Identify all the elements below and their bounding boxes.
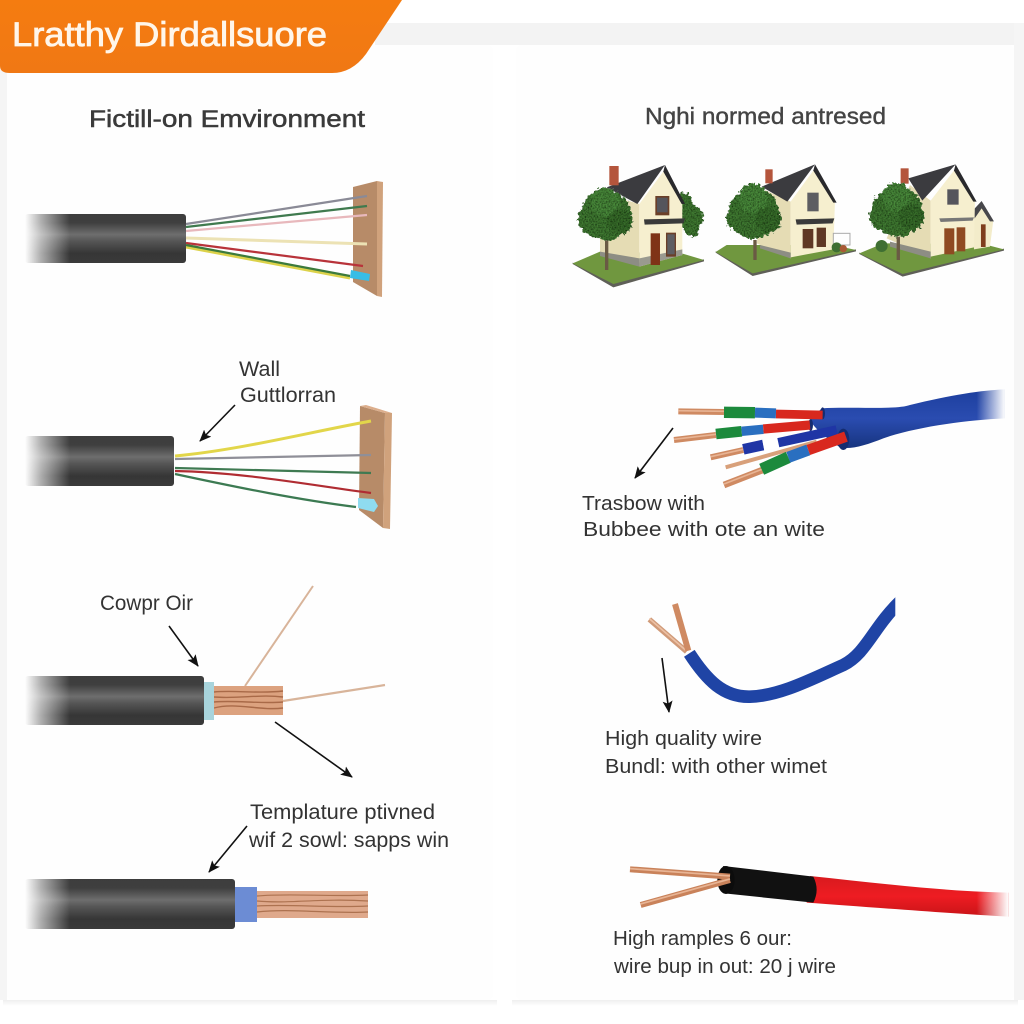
diagram: cable to wall with six wires (25, 181, 383, 297)
label: high quality wire: High quality wire (605, 728, 762, 750)
label: high ramples (613, 928, 836, 978)
house one (573, 165, 704, 287)
title banner (0, 0, 402, 73)
label: high ramples: High ramples 6 our: (613, 928, 792, 950)
label: high quality wire: Bundl: with other wimet (605, 756, 827, 778)
panel: right column (516, 45, 1014, 1000)
title banner: Lratthy Dirdallsuore (12, 16, 327, 54)
house two (716, 164, 856, 276)
arrow: wall label to wire (200, 405, 235, 441)
diagram: stripped cable with blue insulation (25, 878, 368, 930)
arrow: blue cable to label (635, 428, 673, 478)
diagram: red and black wire (630, 866, 1008, 918)
label: trasbow: Bubbee with ote an wite (583, 519, 825, 541)
house three (859, 164, 1004, 277)
diagram: curved blue wire (649, 600, 902, 697)
houses row (573, 164, 1004, 287)
label: trasbow: Trasbow with (582, 493, 705, 515)
label: high quality wire (605, 728, 827, 778)
panel: left column (7, 45, 493, 1000)
arrow: strands to label (275, 722, 352, 777)
diagram: stripped cable with stray strands (25, 586, 385, 726)
label: wall (239, 358, 336, 407)
label: high ramples: wire bup in out: 20 j wire (613, 956, 836, 978)
arrow: curved wire to label (662, 658, 669, 712)
label: template (248, 801, 449, 852)
label: wall: Guttlorran (240, 384, 336, 407)
diagram: blue multicore cable (674, 388, 1005, 485)
label: copper: Cowpr Oir (100, 592, 193, 615)
heading: right column: Nghi normed antresed (645, 103, 886, 129)
arrow: label to lower cable (209, 826, 247, 872)
arrow: copper label to cable (169, 626, 198, 666)
label: template: Templature ptivned (250, 801, 435, 824)
label: template: wif 2 sowl: sapps win (248, 829, 449, 852)
diagram: cable to wall with five wires (25, 405, 392, 529)
label: wall: Wall (239, 358, 280, 381)
heading: left column: Fictill-on Emvironment (89, 106, 365, 133)
label: trasbow (582, 493, 825, 541)
